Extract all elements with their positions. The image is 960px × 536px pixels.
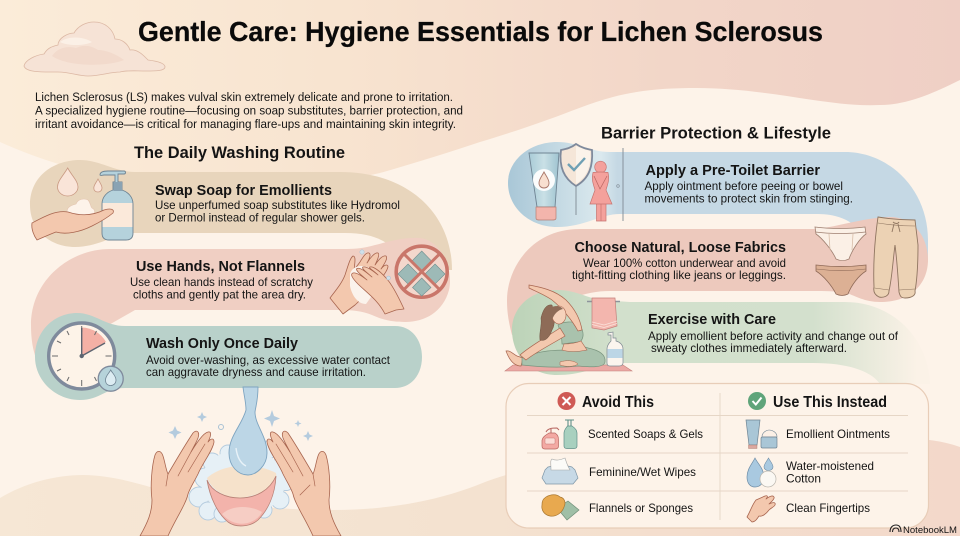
band: blue <box>508 142 928 262</box>
body text: Apply emollient before activity and change out of <box>648 330 899 343</box>
section heading: barrier protection and lifestyle: Barrier Protection & Lifestyle <box>601 124 831 142</box>
intro paragraph <box>35 90 463 131</box>
icon: foam <box>67 199 95 216</box>
left hand <box>140 431 214 536</box>
body text <box>155 199 400 224</box>
section heading: daily washing routine: The Daily Washing Routine <box>134 144 345 162</box>
text: feminine wet wipes: Feminine/Wet Wipes <box>589 466 696 479</box>
panel: avoid vs use instead table <box>506 384 928 528</box>
water drop <box>229 387 267 475</box>
panel: apply a pre-toilet barrier <box>508 142 928 262</box>
heading: Use Hands, Not Flannels <box>136 259 305 275</box>
text: flannels or sponges: Flannels or Sponges <box>589 502 693 515</box>
icon: mat <box>505 365 632 371</box>
icon: no flannel <box>396 246 447 297</box>
icon: wet wipes packet <box>542 458 578 484</box>
icon: pump bottle <box>100 171 133 240</box>
decorative cloud <box>24 22 165 76</box>
band: pink <box>31 238 450 358</box>
icon: white briefs <box>815 227 866 260</box>
icon: washing hands <box>330 250 404 314</box>
text: water-moistened cotton: Cotton <box>786 472 821 486</box>
body text <box>130 276 313 302</box>
body text: or Dermol instead of regular shower gels. <box>155 212 365 224</box>
body text <box>572 257 786 282</box>
text: emollient ointments: Emollient Ointments <box>786 428 890 441</box>
illustration: hands, soap and water <box>140 387 341 536</box>
panel: swap soap for emollients <box>30 160 452 270</box>
text: clean fingertips: Clean Fingertips <box>786 502 870 515</box>
icon: ointment tube <box>529 153 559 220</box>
body text: Apply ointment before peeing or bowel <box>644 180 843 193</box>
right hand <box>267 431 341 536</box>
icon: tan briefs <box>816 265 866 296</box>
icon: drops <box>58 168 102 196</box>
text: water-moistened cotton <box>786 460 874 486</box>
icon: sponge and flannel <box>542 495 579 520</box>
icon: green check <box>748 392 766 410</box>
icon: alternative tube and jar <box>746 420 777 448</box>
band: pink <box>507 217 928 335</box>
icon: yoga figure <box>506 285 605 367</box>
text: water-moistened cotton: Water-moistened <box>786 460 874 473</box>
body text <box>644 180 853 206</box>
notebooklm watermark: NotebookLM <box>903 525 957 536</box>
body text: sweaty clothes immediately afterward. <box>651 342 847 355</box>
icon: open hand <box>32 209 113 240</box>
panel: use hands, not flannels <box>31 238 450 358</box>
body text: Avoid over-washing, as excessive water contact <box>146 354 391 367</box>
intro paragraph: Lichen Sclerosus (LS) makes vulval skin extremely delicate and prone to irritation. <box>35 90 453 104</box>
heading: avoid this: Avoid This <box>582 394 654 411</box>
heading: Choose Natural, Loose Fabrics <box>574 240 786 256</box>
icon: towel on rail <box>587 298 620 330</box>
intro paragraph: irritant avoidance—is critical for managing flare-ups and maintaining skin integrity. <box>35 117 456 131</box>
soap <box>207 466 276 498</box>
panel: choose natural, loose fabrics <box>507 217 928 335</box>
band: green <box>512 290 930 384</box>
icon: scented soap bottles <box>542 420 577 449</box>
body text: tight-fitting clothing like jeans or leggings. <box>572 269 786 282</box>
body text: Use clean hands instead of scratchy <box>130 276 313 289</box>
icon: clock <box>49 323 123 391</box>
title: Gentle Care: Hygiene Essentials for Lichen Sclerosus <box>138 16 823 47</box>
heading: Exercise with Care <box>648 312 776 328</box>
band: tan <box>30 160 452 270</box>
foam <box>189 441 294 522</box>
body text: Use unperfumed soap substitutes like Hydromol <box>155 199 400 212</box>
sparkles <box>168 410 313 441</box>
body text: cloths and gently pat the area dry. <box>133 288 306 302</box>
icon: shield <box>561 144 592 186</box>
panel: wash only once daily <box>35 313 422 400</box>
icon: lotion bottle <box>607 332 623 366</box>
table card <box>506 384 928 528</box>
band: teal <box>35 313 422 400</box>
text: scented soaps and gels: Scented Soaps & Gels <box>588 428 703 441</box>
body text <box>146 354 391 379</box>
body text <box>648 330 899 355</box>
icon: red cross <box>558 392 576 410</box>
body text: can aggravate dryness and cause irritation. <box>146 366 366 379</box>
icon: clean hand <box>747 496 775 522</box>
divider line <box>576 148 623 221</box>
heading: use this instead: Use This Instead <box>773 394 887 411</box>
panel: exercise with care <box>505 285 930 384</box>
heading: Wash Only Once Daily <box>146 336 298 352</box>
icon: water drops and cotton <box>747 458 776 487</box>
body text: Wear 100% cotton underwear and avoid <box>583 257 786 270</box>
heading: Swap Soap for Emollients <box>155 183 332 199</box>
body text: movements to protect skin from stinging. <box>644 192 853 206</box>
icon: person <box>590 161 612 221</box>
icon: loose trousers <box>874 217 918 298</box>
intro paragraph: A specialized hygiene routine—focusing on soap substitutes, barrier protection, and <box>35 104 463 118</box>
heading: Apply a Pre-Toilet Barrier <box>646 163 820 179</box>
